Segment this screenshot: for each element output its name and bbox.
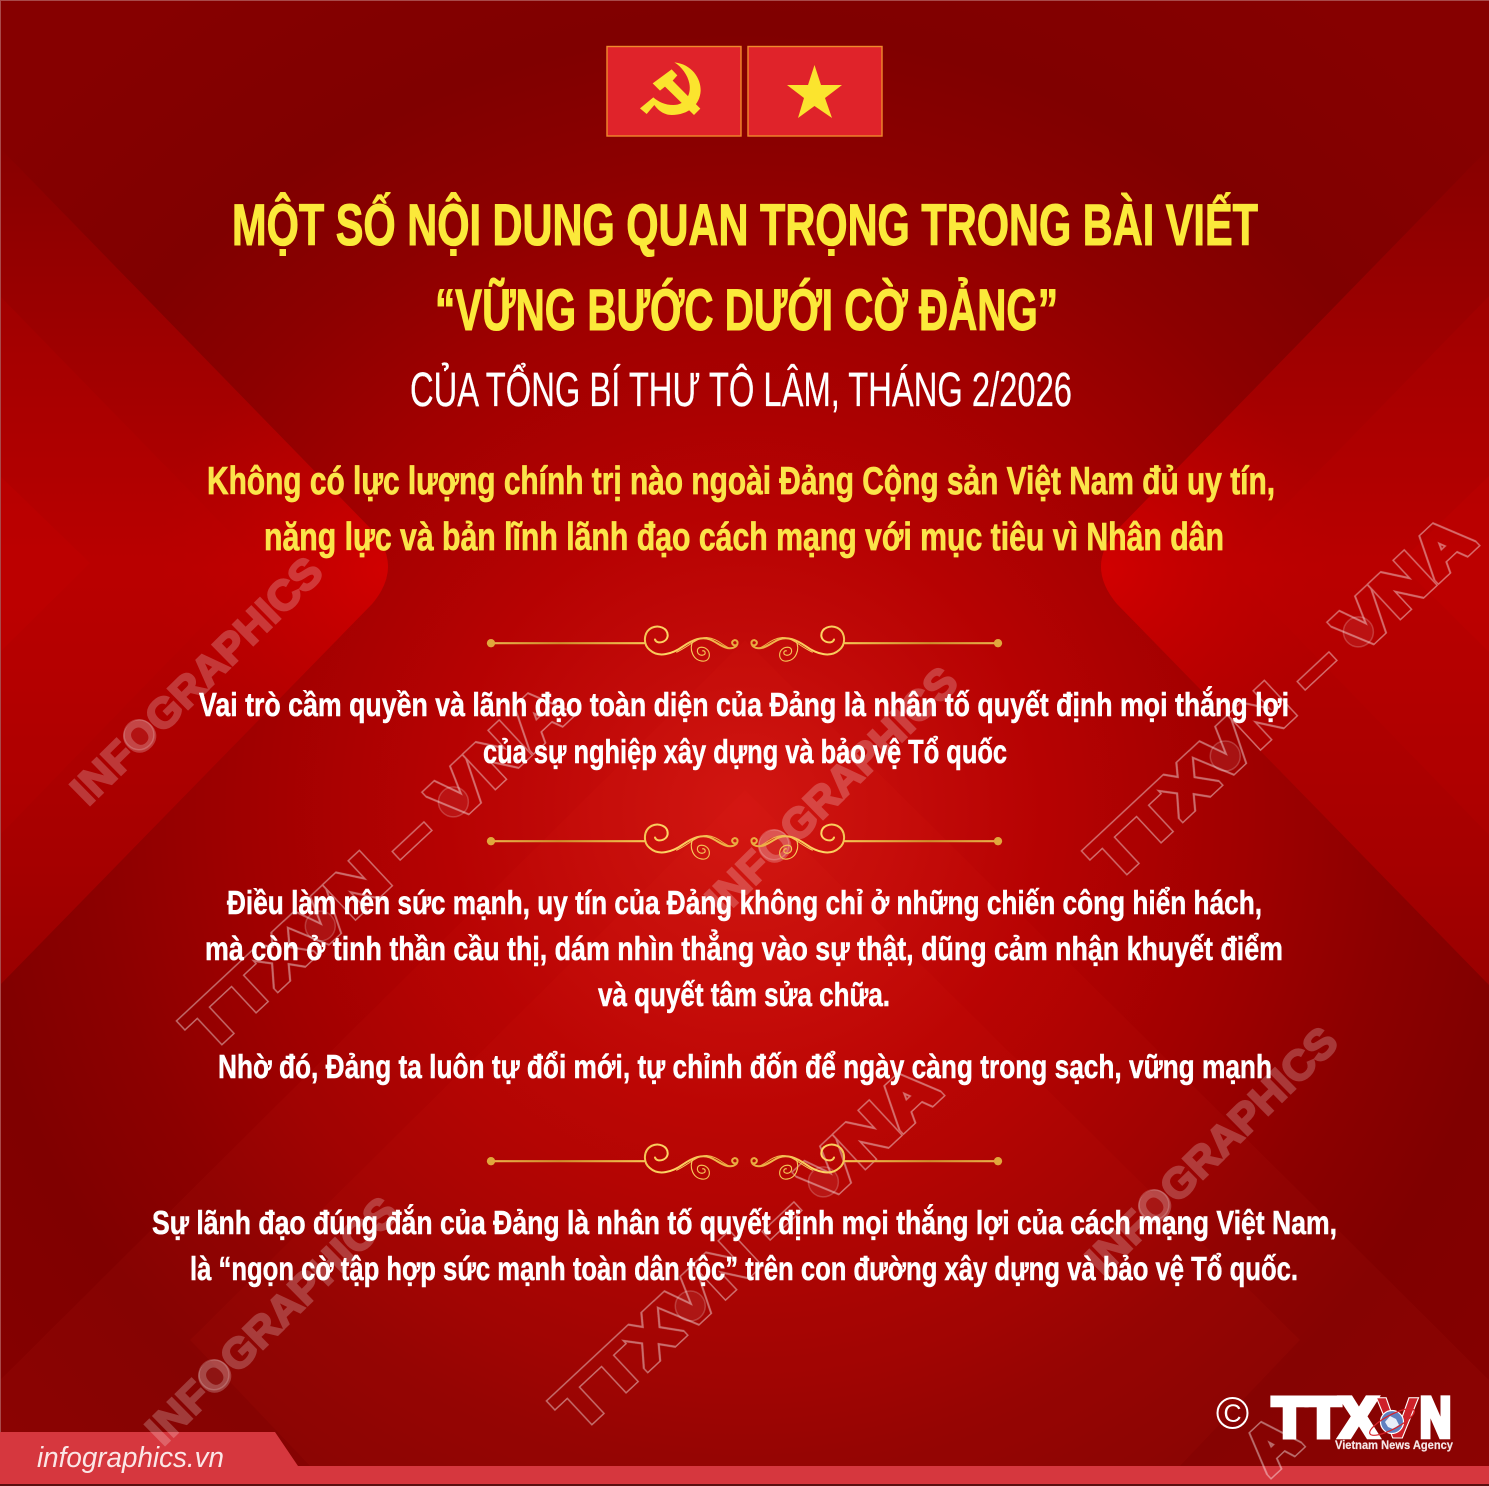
- logo: TTXVN: [1272, 1386, 1453, 1452]
- watermarks: [61, 504, 1487, 1486]
- watermarks: TTXVN – VNA: [1076, 504, 1487, 893]
- highlight statement: [207, 460, 1275, 559]
- text block 2: [205, 884, 1283, 1085]
- watermarks: A: [1232, 1405, 1312, 1486]
- left chevrons: [0, 148, 388, 985]
- watermarks: INFOGRAPHICS: [136, 1188, 407, 1453]
- icon: star: [787, 65, 842, 118]
- divider 3: [487, 1145, 1002, 1179]
- footer band: [0, 1432, 1489, 1486]
- title: “VỮNG BƯỚC DƯỚI CỜ ĐẢNG”: [435, 278, 1058, 343]
- logo: TTXVN: N: [1420, 1386, 1451, 1448]
- logo: TTXVN: Vietnam News Agency: [1335, 1438, 1453, 1452]
- watermarks: TTXVN – VNA: [171, 674, 582, 1063]
- subtitle: author and date: CỦA TỔNG BÍ THƯ TÔ LÂM, THÁNG 2/2026: [410, 362, 1072, 417]
- watermarks: INFOGRAPHICS: [61, 548, 332, 813]
- website label: infographics.vn: [37, 1442, 224, 1474]
- highlight statement: năng lực và bản lĩnh lãnh đạo cách mạng với mục tiêu vì Nhân dân: [264, 516, 1224, 559]
- logo: TTXVN: V: [1376, 1386, 1419, 1451]
- national flag: [748, 46, 882, 136]
- divider 2: [487, 825, 1002, 859]
- text block 2: và quyết tâm sửa chữa.: [598, 976, 890, 1013]
- title: [232, 193, 1258, 343]
- text block 3: [152, 1204, 1337, 1287]
- watermarks: INFOGRAPHICS: [1076, 1018, 1347, 1283]
- party flag: [607, 46, 741, 136]
- copyright symbol: [1218, 1398, 1248, 1428]
- logo: TTXVN: TTX: [1272, 1386, 1378, 1448]
- divider 1: [487, 627, 1002, 661]
- text block 1: [199, 686, 1289, 770]
- copyright symbol: C: [1223, 1400, 1242, 1428]
- central diamonds: [0, 640, 1489, 1466]
- right chevrons: [1101, 148, 1489, 985]
- watermarks: TTXVN – VNA: [541, 1054, 952, 1443]
- text block 1: của sự nghiệp xây dựng và bảo vệ Tổ quốc: [483, 733, 1007, 770]
- icon: hammer and sickle: [640, 62, 701, 115]
- watermarks: INFOGRAPHICS: [696, 658, 967, 923]
- icon: globe: [1367, 1404, 1417, 1440]
